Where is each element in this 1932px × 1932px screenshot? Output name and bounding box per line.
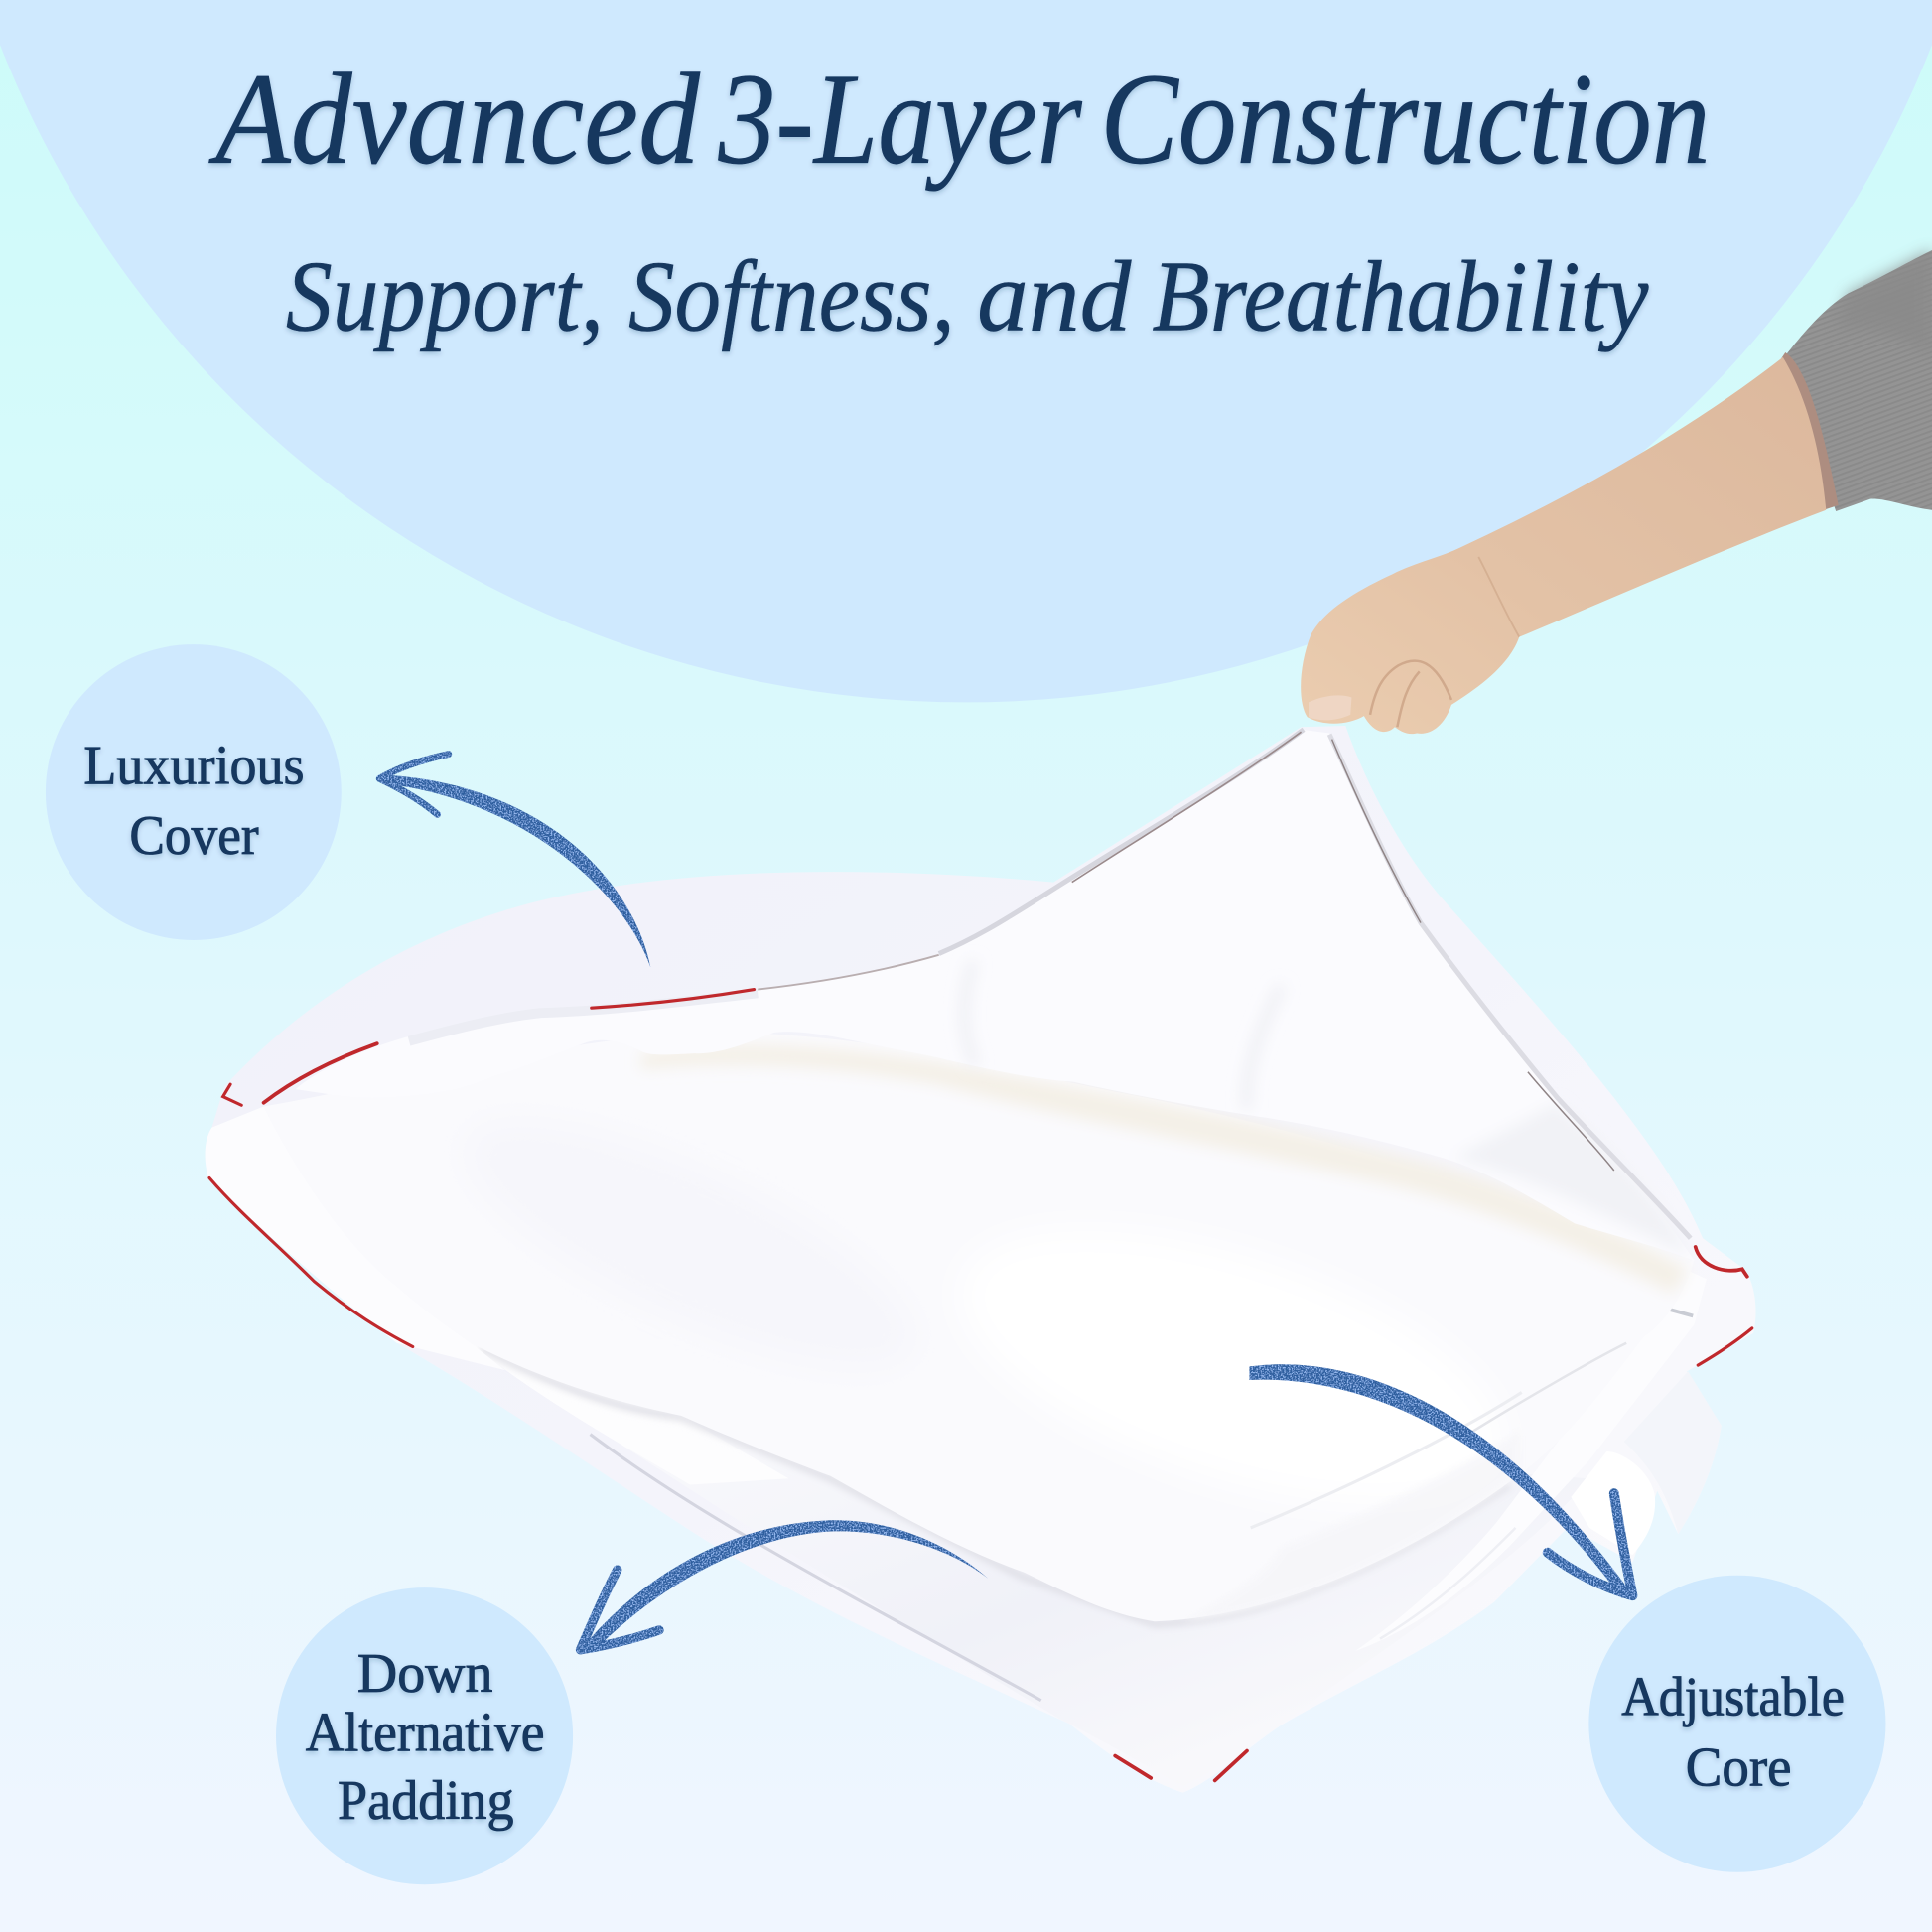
callout: down alternative padding: Down: [357, 1643, 493, 1705]
pillow: lifted top flap: [296, 730, 1694, 1261]
title: 3-Layer: [718, 48, 1082, 192]
header circle: [0, 0, 1932, 702]
arm and hand: [1301, 357, 1826, 734]
sleeve: [1780, 250, 1932, 511]
subtitle: and: [977, 241, 1132, 353]
fabric roll: [1571, 1451, 1655, 1555]
title: Construction: [1100, 48, 1711, 192]
callout: adjustable core: Core: [1686, 1736, 1792, 1798]
left strip: [206, 1106, 505, 1370]
title: Advanced: [208, 48, 701, 192]
arrow: to luxurious cover: [379, 755, 650, 967]
core seams: [1251, 1392, 1522, 1528]
callout: luxurious cover: Cover: [129, 805, 259, 867]
shadow beneath core: [481, 1348, 1509, 1624]
arrow: to adjustable core: [1249, 1364, 1634, 1598]
bright zip strip on right: [1355, 1269, 1707, 1651]
callout: down alternative padding: Alternative: [306, 1703, 545, 1764]
arrow: to down alternative padding: [581, 1520, 988, 1650]
subtitle: Softness,: [628, 241, 955, 353]
zipper seams: [939, 730, 1304, 954]
pillow: inner adjustable core: [264, 1033, 1694, 1621]
callout: adjustable core: Adjustable: [1621, 1667, 1845, 1728]
subtitle: [286, 241, 1649, 353]
title: [208, 48, 1711, 192]
cream shadow below flap: [640, 1045, 1688, 1294]
pillow: red piping: [209, 990, 1752, 1780]
subtitle: Support,: [286, 241, 604, 353]
flap folds: [964, 961, 1282, 1109]
lower layer under core: [471, 1343, 1589, 1787]
callout: down alternative padding: [276, 1587, 573, 1884]
callout: adjustable core: [1588, 1576, 1885, 1872]
subtitle: Breathability: [1152, 241, 1649, 353]
pillow: outer cover and lower padding: [206, 726, 1756, 1793]
callout: luxurious cover: [46, 644, 342, 940]
callout: down alternative padding: Padding: [338, 1770, 514, 1832]
zip seam: [590, 1435, 1041, 1701]
callout: luxurious cover: Luxurious: [83, 735, 305, 796]
